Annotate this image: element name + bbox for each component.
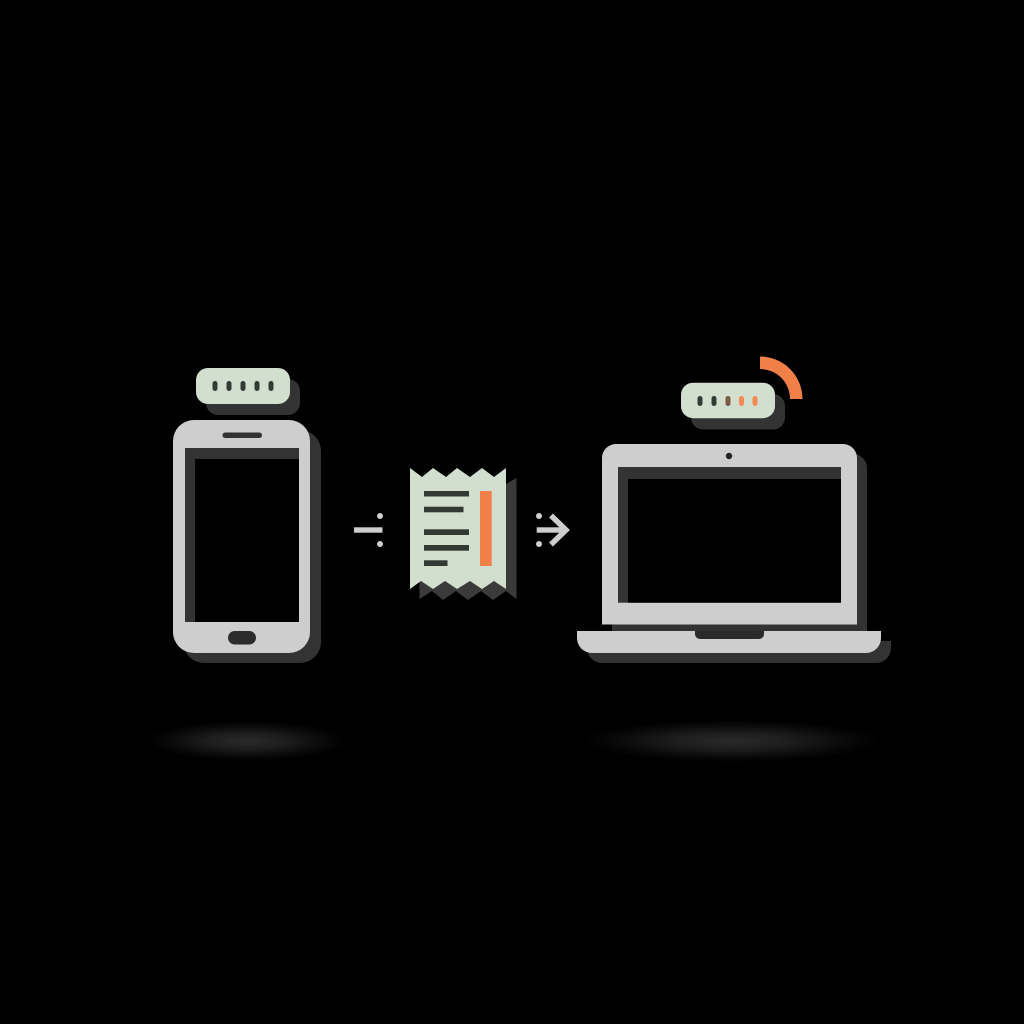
arrow: receipt to laptop	[536, 513, 566, 547]
icon: receipt	[410, 468, 516, 600]
icon: laptop	[577, 444, 891, 663]
icon: smartphone	[173, 420, 321, 663]
floor shadow: phone	[147, 721, 347, 761]
icon: wifi arc	[760, 356, 802, 399]
floor shadow: laptop	[584, 720, 880, 762]
icon: laptop signal pill	[681, 383, 785, 430]
icon: phone signal pill	[196, 368, 300, 415]
arrow: phone to receipt	[354, 513, 383, 547]
